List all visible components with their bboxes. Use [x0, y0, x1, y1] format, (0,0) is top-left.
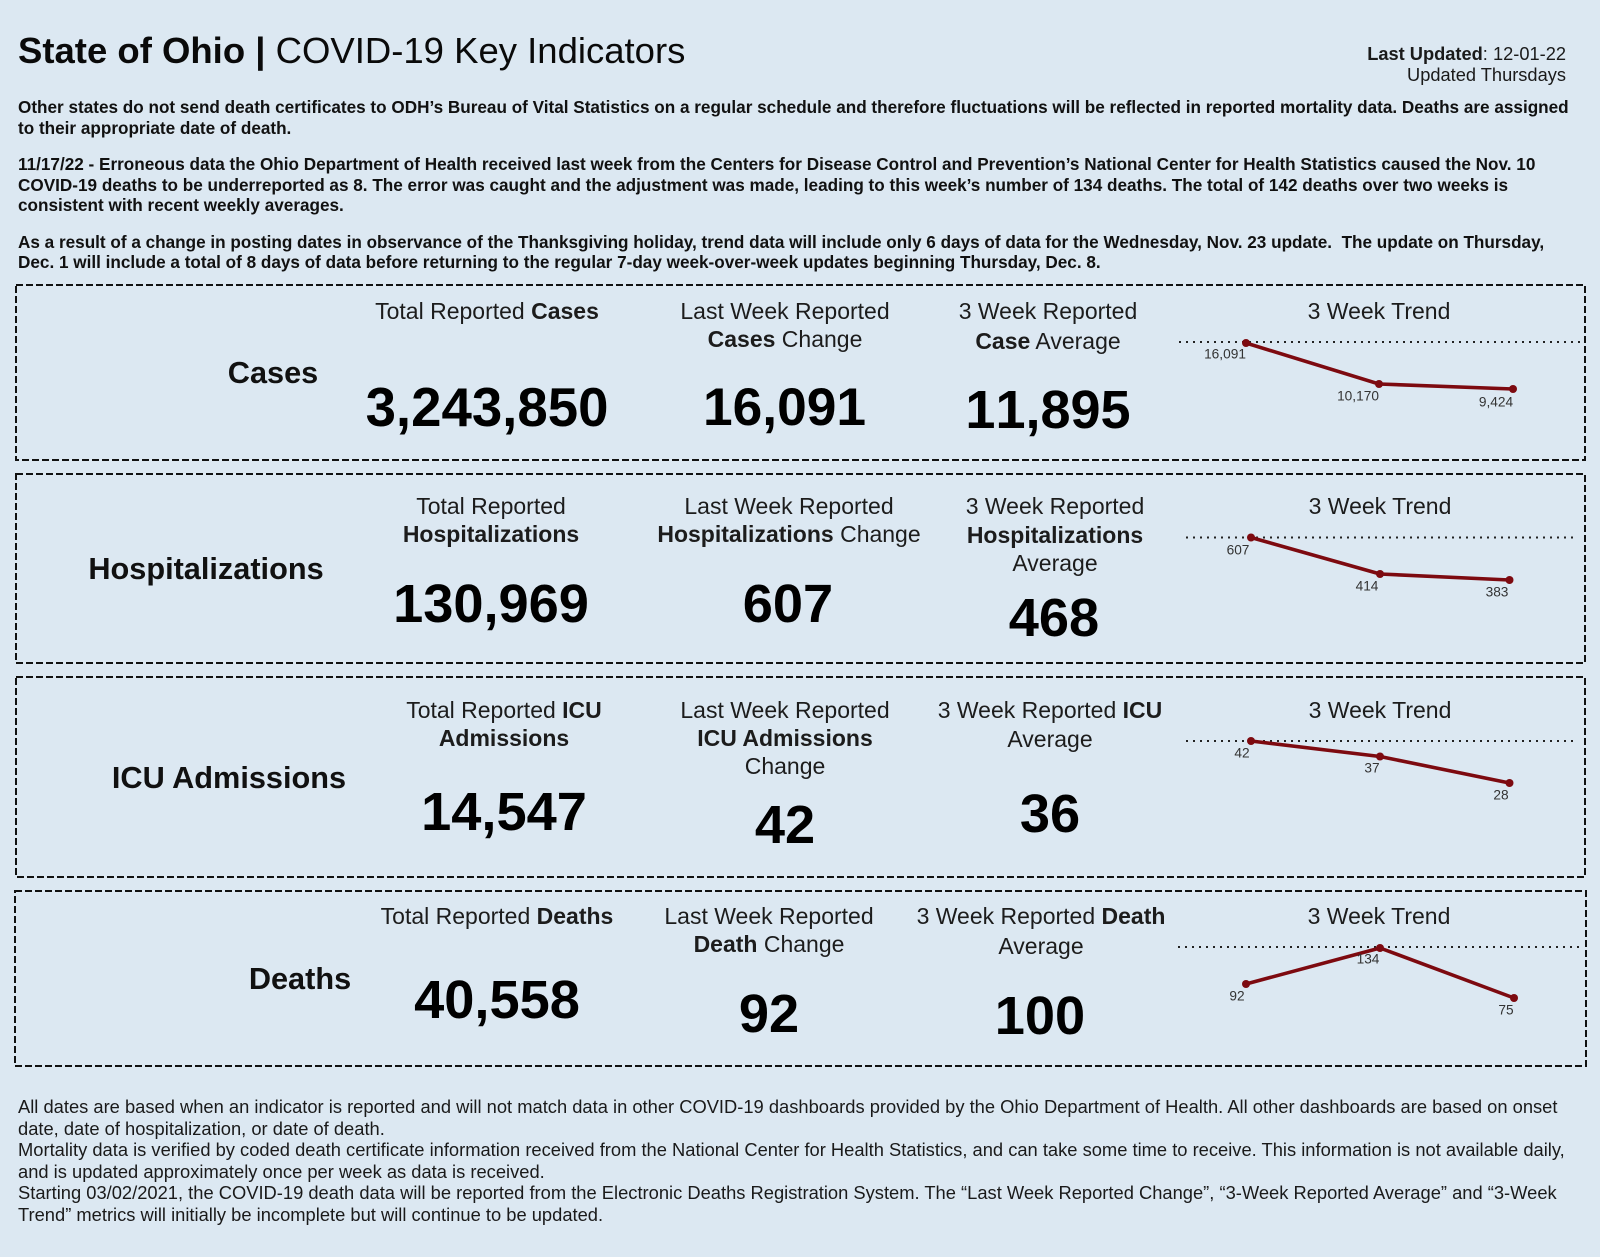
average header: 3 Week Reported Death Average	[917, 903, 1165, 959]
weekly change value: 42	[755, 795, 815, 855]
total icu value: 14,547	[421, 782, 587, 842]
average header: 3 Week Reported Hospitalizations Average	[966, 493, 1144, 576]
panel: hospitalizations	[15, 473, 1586, 664]
footnotes: All dates are based when an indicator is reported and will not match data in other COVID-19 dashboards provided by the Ohio Department of Health. All other dashboards are based on onset date, date of hospitalization, or date of death. Mortality data is verified by coded death certificate information received from the National Center for Health Statistics, and can take some time to receive. This information is not available daily, and is updated approximately once per week as data is received. Starting 03/02/2021, the COVID-19 death data will be reported from the Electronic Deaths Registration System. The “Last Week Reported Change”, “3-Week Reported Average” and “3-Week Trend” metrics will initially be incomplete but will continue to be updated.	[18, 1096, 1565, 1225]
total icu header: Total Reported ICU Admissions	[406, 696, 602, 750]
trend header: 3 Week Trend	[1309, 696, 1451, 722]
weekly change header: Last Week Reported Cases Change	[680, 298, 890, 352]
total cases value: 3,243,850	[366, 377, 608, 438]
trend chart: cases: 9,424	[1479, 394, 1514, 410]
label: deaths: Deaths	[249, 961, 351, 996]
average value: 11,895	[965, 380, 1131, 440]
trend chart: cases	[1179, 339, 1580, 410]
total deaths header: Total Reported Deaths	[381, 902, 613, 928]
last updated stamp: Last Updated: 12-01-22 Updated Thursdays	[1367, 42, 1566, 85]
trend chart: deaths: 134	[1357, 952, 1380, 966]
trend chart: cases: 10,170	[1337, 388, 1379, 404]
note: erroneous data: 11/17/22 - Erroneous data the Ohio Department of Health received last week from the Centers for Disease Control and Prevention’s National Center for Health Statistics caused the Nov. 10 COVID-19 deaths to be underreported as 8. The error was caught and the adjustment was made, leading to this week’s number of 134 deaths. The total of 142 deaths over two weeks is consistent with recent weekly averages.	[18, 154, 1535, 215]
average value: 36	[1020, 784, 1080, 844]
total deaths value: 40,558	[414, 970, 580, 1030]
panel: cases	[15, 284, 1586, 461]
panel: icu admissions	[15, 676, 1586, 878]
weekly change value: 607	[743, 574, 833, 634]
label: hospitalizations: Hospitalizations	[88, 551, 324, 586]
trend chart: hospitalizations: 607	[1227, 542, 1249, 558]
total hospitalizations header: Total Reported Hospitalizations	[403, 492, 579, 546]
note: thanksgiving schedule: As a result of a change in posting dates in observance of the Thanksgiving holiday, trend data will include only 6 days of data for the Wednesday, Nov. 23 update. The update on Thursday, Dec. 1 will include a total of 8 days of data before returning to the regular 7-day week-over-week updates beginning Thursday, Dec. 8.	[18, 232, 1544, 272]
trend chart: hospitalizations: 383	[1486, 584, 1509, 600]
average value: 468	[1009, 588, 1099, 648]
note: other states: Other states do not send death certificates to ODH’s Bureau of Vital Statistics on a regular schedule and therefore fluctuations will be reflected in reported mortality data. Deaths are assigned to their appropriate date of death.	[18, 97, 1569, 138]
trend chart: hospitalizations: 414	[1356, 578, 1379, 594]
average header: 3 Week Reported Case Average	[959, 298, 1137, 354]
total hospitalizations value: 130,969	[393, 574, 589, 634]
weekly change header: Last Week Reported ICU Admissions Change	[680, 696, 890, 778]
trend chart: icu admissions: 37	[1364, 760, 1380, 776]
trend header: 3 Week Trend	[1309, 492, 1451, 518]
label: icu admissions: ICU Admissions	[112, 760, 346, 795]
average value: 100	[995, 986, 1085, 1046]
average header: 3 Week Reported ICU Average	[938, 697, 1162, 752]
weekly change value: 16,091	[703, 378, 866, 437]
total cases header: Total Reported Cases	[375, 298, 599, 324]
trend chart: deaths: 92	[1229, 988, 1245, 1004]
trend chart: deaths: 75	[1498, 1002, 1514, 1018]
title: State of Ohio | COVID-19 Key Indicators	[18, 30, 685, 71]
trend chart: cases: 16,091	[1204, 346, 1246, 362]
weekly change header: Last Week Reported Death Change	[664, 902, 874, 956]
label: cases: Cases	[228, 355, 318, 390]
weekly change header: Last Week Reported Hospitalizations Change	[657, 492, 921, 546]
panel: deaths	[14, 890, 1587, 1067]
trend chart: icu admissions: 28	[1493, 788, 1509, 802]
weekly change value: 92	[739, 984, 799, 1044]
trend chart: deaths	[1178, 944, 1579, 1018]
trend chart: hospitalizations	[1186, 534, 1573, 600]
trend chart: icu admissions	[1186, 737, 1573, 802]
trend chart: icu admissions: 42	[1234, 746, 1250, 760]
trend header: 3 Week Trend	[1308, 298, 1450, 324]
trend header: 3 Week Trend	[1308, 902, 1450, 928]
